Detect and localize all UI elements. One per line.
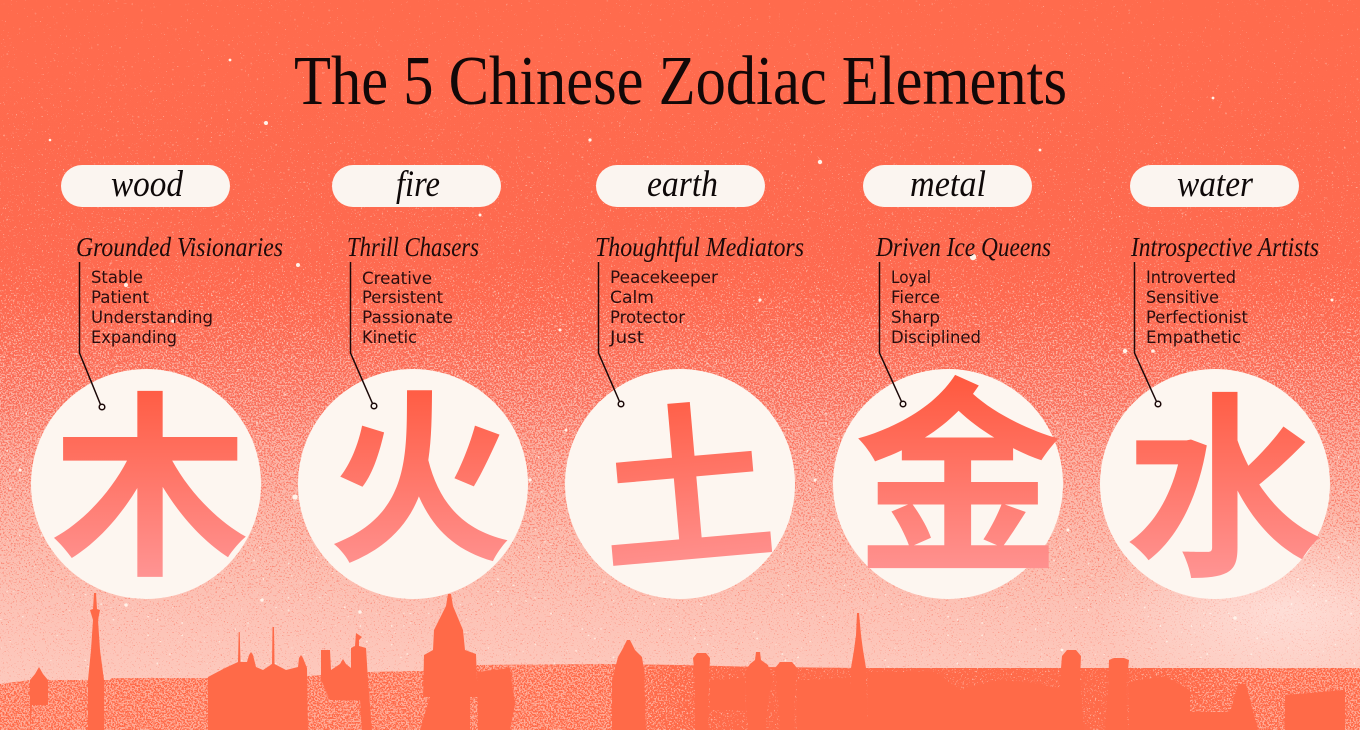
trait list: earth: Calm bbox=[610, 288, 654, 307]
heading: Thoughtful Mediators: Thoughtful Mediators bbox=[595, 232, 804, 262]
skyline buildings bbox=[30, 593, 1345, 730]
pill: water: water bbox=[1177, 164, 1254, 205]
pill: wood: wood bbox=[111, 164, 183, 205]
title: The 5 Chinese Zodiac Elements bbox=[294, 43, 1067, 120]
trait list: fire: Passionate bbox=[362, 308, 453, 327]
trait list: water: Perfectionist bbox=[1146, 308, 1249, 327]
leader line: fire bbox=[350, 262, 377, 409]
trait list: metal: Disciplined bbox=[891, 328, 981, 347]
circle with metal character: 金 bbox=[854, 367, 1062, 599]
trait list: water: Sensitive bbox=[1146, 288, 1219, 307]
panel: earth bbox=[565, 164, 804, 599]
leader line: wood bbox=[80, 262, 105, 410]
circle with fire character: 火 bbox=[328, 380, 512, 586]
trait list: water bbox=[1146, 268, 1249, 347]
trait list: earth: Protector bbox=[610, 308, 685, 327]
circle with earth character: 土 bbox=[591, 387, 782, 596]
pill: earth bbox=[596, 164, 765, 207]
panel: water bbox=[1100, 164, 1330, 602]
trait list: water: Empathetic bbox=[1146, 328, 1241, 347]
leader line: water bbox=[1134, 262, 1161, 407]
pill: wood bbox=[61, 164, 230, 207]
trait list: earth bbox=[609, 268, 718, 347]
trait list: earth: Just bbox=[609, 328, 645, 347]
trait list: metal: Sharp bbox=[891, 308, 940, 327]
trait list: wood: Understanding bbox=[91, 308, 213, 327]
skyline bbox=[0, 593, 1360, 730]
trait list: wood: Stable bbox=[91, 268, 143, 287]
pill: metal: metal bbox=[910, 164, 986, 205]
trait list: metal: Loyal bbox=[891, 268, 931, 287]
panel: wood bbox=[31, 164, 283, 601]
leader line: metal bbox=[880, 262, 906, 407]
trait list: fire: Persistent bbox=[362, 288, 444, 307]
circle with wood character: 木 bbox=[51, 380, 249, 601]
leader line: earth bbox=[598, 262, 624, 407]
trait list: wood: Patient bbox=[91, 288, 150, 307]
trait list: fire: Creative bbox=[362, 269, 432, 288]
panel: fire bbox=[298, 164, 528, 599]
trait list: metal: Fierce bbox=[891, 288, 940, 307]
trait list: water: Introverted bbox=[1146, 268, 1236, 287]
heading: Thrill Chasers: Thrill Chasers bbox=[347, 232, 479, 262]
pill: metal bbox=[863, 164, 1032, 207]
trait list: metal bbox=[891, 268, 981, 347]
pill: water bbox=[1130, 164, 1299, 207]
pill: fire: fire bbox=[396, 164, 440, 205]
trait list: fire: Kinetic bbox=[362, 328, 417, 347]
circle with water character: 水 bbox=[1125, 381, 1323, 602]
trait list: wood bbox=[91, 268, 213, 347]
pill: fire bbox=[332, 164, 501, 207]
heading: Grounded Visionaries: Grounded Visionaries bbox=[76, 232, 283, 262]
skyline ground bbox=[0, 664, 1360, 730]
pill: earth: earth bbox=[647, 164, 718, 205]
trait list: fire bbox=[362, 269, 453, 347]
heading: Driven Ice Queens: Driven Ice Queens bbox=[875, 232, 1051, 262]
trait list: wood: Expanding bbox=[91, 328, 177, 347]
heading: Introspective Artists: Introspective Artists bbox=[1130, 232, 1319, 262]
panel: metal bbox=[833, 164, 1063, 599]
stars bbox=[18, 59, 1334, 651]
trait list: earth: Peacekeeper bbox=[610, 268, 718, 287]
